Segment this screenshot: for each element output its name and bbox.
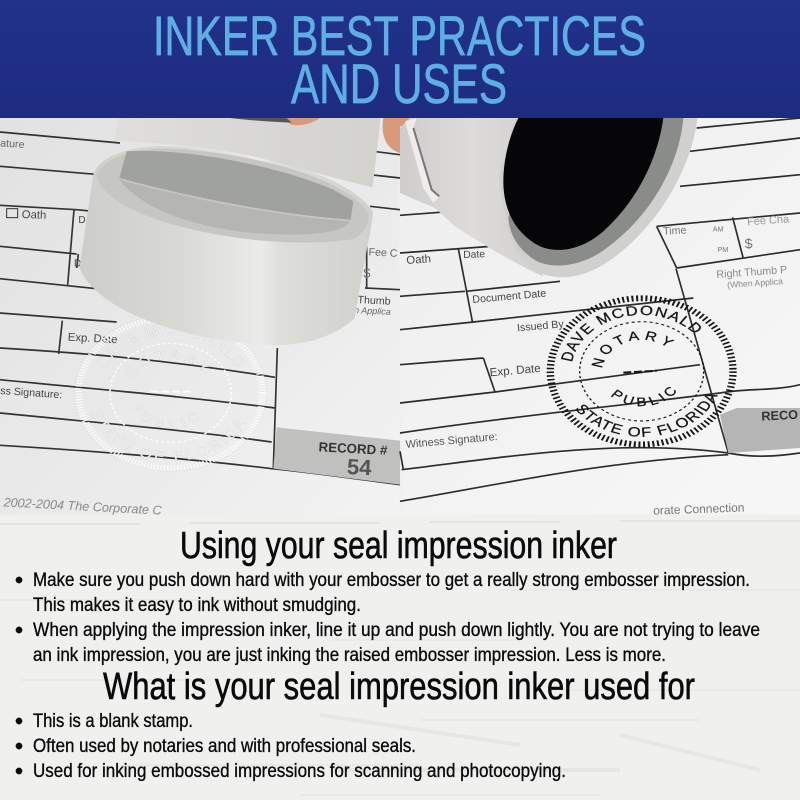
record box, right: RECO [761, 408, 798, 424]
record box [273, 427, 400, 485]
form labels, right: Document Date [472, 288, 547, 306]
form labels, left: Fee C [368, 246, 398, 260]
embossed seal impression: PUBLIC [131, 403, 200, 429]
bullet list: using: an ink impression, you are just inking the raised embosser impression. Less is more. [33, 644, 666, 666]
recessed dark face [119, 151, 353, 220]
form labels, left: ature [0, 137, 25, 151]
title [153, 4, 646, 115]
handle clip [405, 118, 440, 203]
bullet list: what: Often used by notaries and with professional seals. [33, 735, 416, 757]
form labels, left: ss Signature: [0, 385, 63, 401]
title: AND USES [291, 52, 507, 115]
form labels, left: n Applica [354, 305, 391, 317]
form labels, left: D [74, 258, 81, 269]
form labels, right: Issued By [517, 318, 565, 334]
form labels, left: D [78, 215, 86, 226]
heading: using: Using your seal impression inker [180, 525, 617, 567]
embossed seal impression [74, 318, 267, 472]
form labels, right: Fee Cha [747, 213, 790, 228]
stamp top face [97, 149, 369, 243]
skin tone sliver [400, 118, 410, 126]
bullet list: what: This is a blank stamp. [33, 710, 193, 732]
inked seal impression [546, 295, 737, 448]
form labels, right: (When Applica [727, 276, 783, 290]
form labels, left: Thumb [357, 294, 391, 308]
paper form, right [400, 118, 800, 515]
form labels, left: 2002-2004 The Corporate C [2, 495, 163, 518]
paper form, left [0, 118, 400, 515]
form labels, right: Right Thumb P [716, 264, 788, 281]
embossed seal impression: STATE OF FLORIDA [92, 410, 246, 462]
stamp handle [114, 118, 381, 187]
form labels, right: Date [463, 249, 485, 261]
form labels, left: Oath [22, 209, 47, 222]
form labels, right: Time [663, 224, 687, 238]
section: using your seal impression inker [16, 525, 760, 666]
form labels, right: Oath [406, 253, 431, 267]
form labels, right: PM [717, 245, 728, 254]
form labels, right: Exp. Date [489, 362, 541, 379]
form labels, right: Witness Signature: [405, 431, 498, 451]
bullet list: what [16, 710, 566, 782]
form labels, left: Exp. Date [68, 332, 118, 346]
form labels, right [405, 213, 790, 518]
stamp handle body [400, 118, 543, 276]
photo: inked impression, right [399, 118, 800, 518]
embossed seal impression: DAVE MCDONALD [96, 326, 244, 368]
header band [0, 0, 800, 118]
black opening [503, 118, 663, 250]
embossed seal impression: NOTARY [125, 350, 212, 377]
form labels, right: $ [744, 235, 753, 252]
section: what is your seal impression inker used for [16, 666, 695, 782]
inked seal impression: STATE OF FLORIDA [576, 394, 718, 437]
form labels, right: orate Connection [653, 500, 745, 518]
inked seal impression: PUBLIC [610, 387, 676, 406]
form labels, right: AM [713, 224, 724, 233]
fingers [283, 118, 400, 153]
inked seal impression: NOTARY [591, 331, 674, 368]
form labels, left [0, 137, 398, 518]
bullet list: using: This makes it easy to ink without smudging. [33, 594, 361, 616]
record box: 54 [346, 454, 373, 480]
stamp cylinder [79, 146, 373, 345]
record box: RECORD # [318, 439, 388, 458]
record box, right [720, 408, 800, 453]
embosser stamp [79, 118, 400, 345]
photo: embosser pressing paper, left [0, 118, 400, 518]
bullet list: using [16, 569, 760, 666]
rim [498, 118, 697, 277]
bullet list: what: Used for inking embossed impressions for scanning and photocopying. [33, 760, 566, 782]
textured wood background [0, 515, 800, 800]
inked seal impression: DAVE MCDONALD [560, 306, 701, 362]
inker stamp upright [400, 118, 697, 277]
form labels, left: $ [363, 266, 370, 280]
